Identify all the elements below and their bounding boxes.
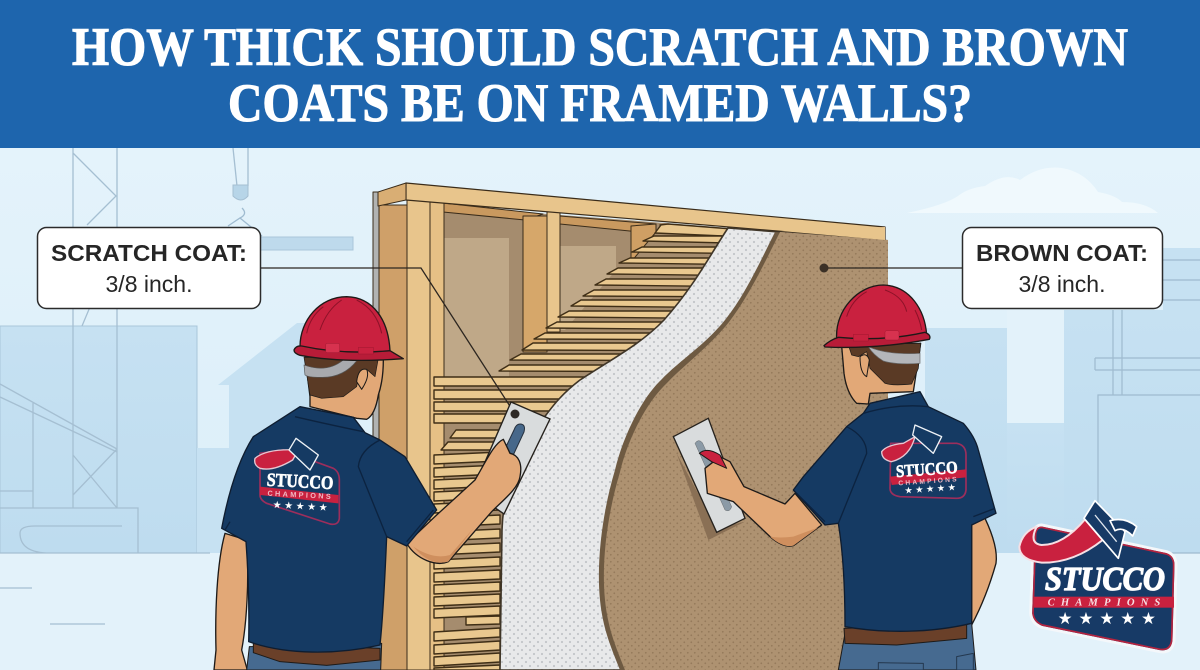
logo: swoosh — [1019, 519, 1103, 563]
worker left: hat brim — [294, 346, 403, 360]
leader line: scratch coat — [261, 268, 515, 414]
worker left: belt — [253, 643, 380, 665]
worker right: hat brim — [824, 332, 930, 347]
left trowel — [472, 402, 550, 514]
lath strips upper — [499, 224, 770, 372]
background: house silhouette — [197, 323, 330, 553]
worker right: arm shading — [770, 527, 818, 546]
worker left: forearm and hand — [407, 439, 521, 563]
worker right: far arm — [972, 518, 996, 625]
wall: left cavity light panel — [444, 238, 509, 378]
worker right: head — [842, 343, 921, 404]
anchor dot: scratch coat — [510, 410, 520, 418]
leader line: brown coat — [823, 267, 962, 269]
callout: brown coat: 3/8 inch. — [1019, 271, 1105, 297]
worker left: pants — [247, 643, 382, 670]
trowel handle — [695, 441, 732, 511]
worker left: head — [305, 357, 383, 419]
worker right: shirt logo: CHAMPIONS — [898, 476, 957, 487]
trowel blade — [673, 418, 745, 532]
header band — [0, 0, 1200, 148]
worker right: headband — [868, 347, 920, 364]
worker left: near arm — [214, 533, 248, 670]
worker left: shirt logo: STUCCO — [266, 470, 334, 494]
worker right: sleeve seam and collar — [797, 406, 995, 523]
worker left: shirt — [222, 407, 437, 652]
worker right: shirt logo: ★★★★★ — [904, 482, 956, 496]
worker right: shirt logo — [882, 425, 966, 498]
wall: top plate — [406, 183, 885, 240]
wall: side face — [379, 205, 408, 670]
title: COATS BE ON FRAMED WALLS? — [228, 73, 972, 133]
wall: right cavity light panel — [560, 246, 616, 330]
worker right — [699, 285, 996, 670]
worker right: belt — [844, 623, 967, 645]
background scene — [0, 148, 1200, 670]
right trowel on brown coat — [673, 418, 745, 540]
logo: red band — [1034, 597, 1174, 608]
logo: CHAMPIONS wordmark: CHAMPIONS — [1048, 598, 1160, 609]
worker right: hard hat — [837, 285, 927, 345]
background: crane tower — [0, 148, 262, 624]
logo: Stucco Champions badge — [1019, 501, 1176, 652]
worker right: arm and hand — [705, 457, 822, 546]
worker right: hair — [848, 343, 921, 385]
worker left: arm shading — [413, 528, 473, 563]
worker right: shirt logo: STUCCO — [895, 458, 958, 481]
callout: brown coat: BROWN COAT: — [976, 240, 1148, 266]
background: buildings right — [925, 328, 1007, 553]
background: building left — [0, 326, 197, 553]
worker right: ear — [860, 355, 869, 377]
worker left: shirt logo — [255, 438, 339, 524]
framed wall — [373, 183, 888, 670]
brown coat layer — [599, 232, 888, 670]
lath strips lower — [434, 377, 614, 670]
worker left: ear — [357, 369, 368, 389]
background: crane beam — [258, 237, 353, 250]
wall: dark header shadows — [443, 203, 543, 220]
logo: stars: ★★★★★ — [1058, 609, 1156, 628]
worker right: pants — [838, 623, 976, 670]
wall: middle stud — [523, 216, 547, 352]
worker left: hair — [304, 357, 378, 398]
wall: main column — [407, 198, 430, 670]
worker left: sleeve seam and collar — [225, 417, 433, 542]
anchor dot: brown coat — [820, 264, 828, 272]
logo: trowel — [1084, 501, 1125, 558]
worker left: headband — [304, 360, 357, 377]
wall: right stud stub — [631, 224, 656, 262]
logo: badge body — [1031, 525, 1176, 652]
background: crane hook — [233, 185, 248, 200]
callout: scratch coat: SCRATCH COAT: — [51, 240, 247, 266]
callout: scratch coat — [38, 228, 260, 308]
worker left: shirt logo: CHAMPIONS — [267, 489, 331, 501]
worker right: red grip — [699, 450, 727, 468]
trowel handle — [502, 424, 524, 462]
scratch coat layer — [500, 228, 885, 670]
wall: sheathing edge — [373, 192, 379, 670]
background: cloud — [907, 168, 1158, 213]
worker left: shirt logo: ★★★★★ — [272, 500, 328, 514]
top plate cap — [781, 227, 885, 240]
callout: scratch coat: 3/8 inch. — [106, 271, 192, 297]
wall: cavity backing — [429, 205, 888, 670]
logo: STUCCO wordmark: STUCCO — [1045, 561, 1165, 598]
callout: brown coat — [962, 228, 1162, 308]
trowel shadow — [677, 453, 745, 540]
worker left: hard hat — [300, 297, 390, 360]
worker left — [214, 297, 521, 670]
background: scaffold lines right — [1080, 260, 1200, 553]
worker right: shirt — [793, 392, 996, 631]
